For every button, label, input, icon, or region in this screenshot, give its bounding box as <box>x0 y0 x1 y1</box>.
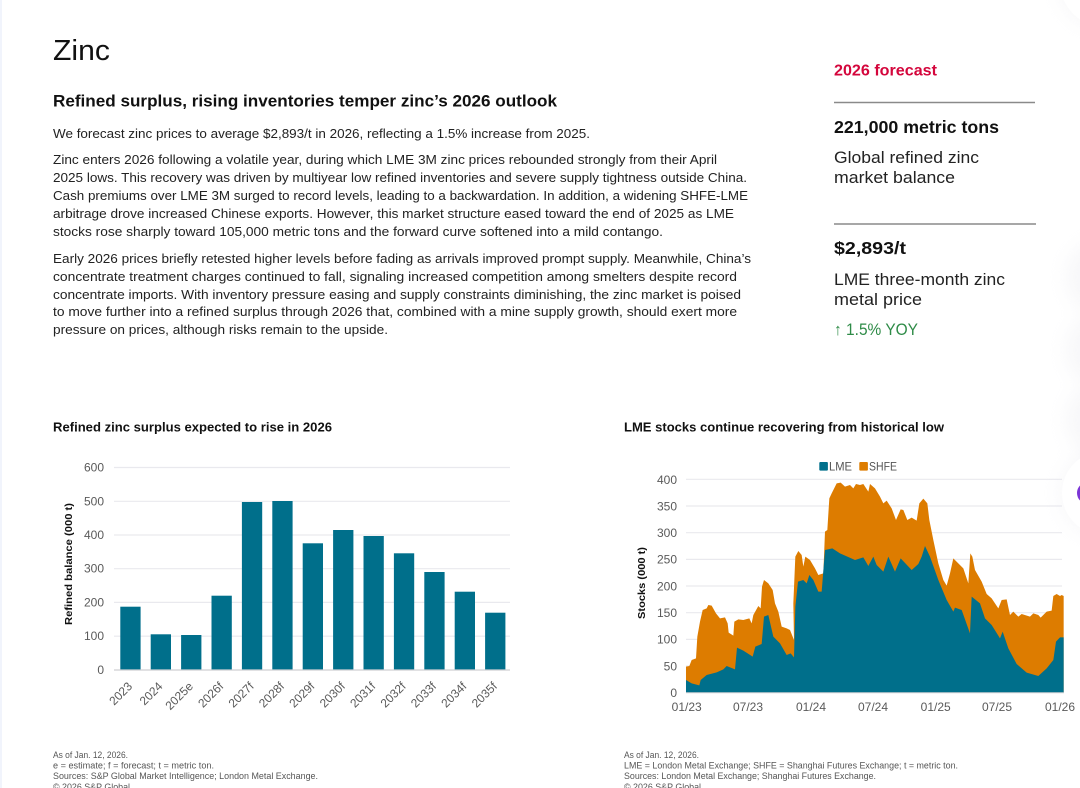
footnotes: Sources: London Metal Exchange; Shanghai Futures Exchange. <box>624 771 876 781</box>
y axis gridlines and labels: 350 <box>657 500 677 514</box>
x axis labels: 2034f <box>438 679 470 710</box>
legend: SHFE <box>869 462 897 474</box>
y axis gridlines and labels: 50 <box>664 660 677 674</box>
title: Zinc <box>53 35 110 67</box>
text block: 2026 outlook <box>53 251 752 337</box>
y axis title: Refined balance (000 t) <box>63 503 75 625</box>
x axis labels: 01/25 <box>921 700 951 714</box>
metric: LME price: $2,893/t <box>834 238 906 258</box>
x axis labels <box>672 700 1075 714</box>
text block: 2025 review: Zinc enters 2026 following a volatile year, during which LME 3M zinc prices rebounded strongly from their April <box>53 152 717 167</box>
text block: 2026 outlook: Early 2026 prices briefly retested higher levels before fading as arrivals improved prompt supply. Meanwhile, China’s <box>53 251 752 266</box>
x axis labels: 2026f <box>195 679 227 710</box>
y axis gridlines and labels: 600 <box>84 460 104 474</box>
panel: main article <box>53 35 752 337</box>
x axis labels: 2028f <box>256 679 288 710</box>
metric: LME price: metal price <box>834 291 922 309</box>
y axis gridlines and labels: 400 <box>84 528 104 542</box>
x axis labels: 07/24 <box>858 700 888 714</box>
y axis gridlines and labels: 200 <box>84 596 104 610</box>
footnotes: As of Jan. 12, 2026. <box>624 750 699 760</box>
x axis labels: 2033f <box>408 679 440 710</box>
x axis labels: 07/25 <box>982 700 1012 714</box>
panel: LME stocks chart <box>624 420 1075 788</box>
footnotes <box>53 750 318 788</box>
metric: LME price <box>834 238 1005 309</box>
y axis gridlines and labels: 200 <box>657 580 677 594</box>
x axis labels <box>106 679 500 713</box>
y axis gridlines and labels: 500 <box>84 494 104 508</box>
footnotes: e = estimate; f = forecast; t = metric ton. <box>53 760 214 770</box>
x axis labels: 2025e <box>162 679 196 713</box>
y axis gridlines and labels: 300 <box>84 562 104 576</box>
y axis gridlines and labels: 250 <box>657 552 677 566</box>
metric: refined balance <box>834 117 999 187</box>
x axis labels: 2023 <box>106 679 135 708</box>
x axis labels: 2035f <box>469 679 500 710</box>
text block: 2026 outlook: concentrate treatment charges continued to fall, signaling increased competition among smelters despite record <box>53 269 737 284</box>
heading: 2026 forecast: 2026 forecast <box>834 62 938 80</box>
y axis gridlines and labels: 0 <box>97 663 104 677</box>
x axis labels: 2024 <box>137 679 166 708</box>
x axis labels: 2030f <box>317 679 348 710</box>
y axis gridlines and labels <box>84 460 510 677</box>
text block: 2025 review: stocks rose sharply toward 105,000 metric tons and the forward curve softened into a mild contango. <box>53 224 663 239</box>
footnotes: Sources: S&P Global Market Intelligence; London Metal Exchange. <box>53 771 318 781</box>
y axis title: Stocks (000 t) <box>636 547 648 619</box>
footnotes <box>624 750 958 788</box>
x axis labels: 01/26 <box>1045 700 1075 714</box>
subheading: Refined surplus, rising inventories temper zinc’s 2026 outlook <box>53 92 558 110</box>
area: SHFE <box>686 483 1064 693</box>
metric: year-over-year change: ↑ 1.5% YOY <box>834 321 918 339</box>
page edge floating buttons <box>1058 0 1080 537</box>
text block: 2025 review: 2025 lows. This recovery was driven by multiyear low refined inventories and severe supply tightness outside China. <box>53 170 747 185</box>
text block: 2026 outlook: concentrate imports. With inventory pressure easing and supply constraints diminishing, the zinc market is poised <box>53 287 741 302</box>
legend <box>819 462 897 474</box>
text block: 2026 outlook: to move further into a refined surplus through 2026 that, combined with a mine supply growth, should exert more <box>53 304 737 319</box>
text block: forecast summary: We forecast zinc prices to average $2,893/t in 2026, reflecting a 1.5% increase from 2025. <box>53 126 590 141</box>
area: LME <box>686 546 1064 693</box>
text block: 2025 review: arbitrage drove increased Chinese exports. However, this market structure eased toward the end of 2025 as LME <box>53 206 734 221</box>
footnotes: As of Jan. 12, 2026. <box>53 750 128 760</box>
panel: refined zinc surplus chart <box>53 420 510 788</box>
panel: 2026 forecast sidebar <box>834 62 1036 339</box>
x axis labels: 2027f <box>226 679 257 710</box>
x axis labels: 2029f <box>286 679 318 710</box>
metric: refined balance: Global refined zinc <box>834 149 979 167</box>
y axis gridlines and labels: 300 <box>657 526 677 540</box>
y axis gridlines and labels: 100 <box>84 629 104 643</box>
x axis labels: 2031f <box>347 679 379 710</box>
bars <box>120 501 505 670</box>
chart title: LME stocks continue recovering from historical low <box>624 420 944 434</box>
chart title: Refined zinc surplus expected to rise in 2026 <box>53 420 332 434</box>
y axis gridlines and labels: 100 <box>657 632 677 646</box>
y axis gridlines and labels <box>657 473 1062 700</box>
x axis labels: 01/24 <box>796 700 826 714</box>
x axis labels: 01/23 <box>672 700 702 714</box>
y axis gridlines and labels: 400 <box>657 473 677 487</box>
legend: LME <box>829 462 852 474</box>
stacked area chart <box>686 483 1064 693</box>
footnotes: LME = London Metal Exchange; SHFE = Shanghai Futures Exchange; t = metric ton. <box>624 760 958 770</box>
text block: 2026 outlook: pressure on prices, although risks remain to the upside. <box>53 322 388 337</box>
metric: refined balance: 221,000 metric tons <box>834 117 999 137</box>
x axis labels: 07/23 <box>733 700 763 714</box>
text block: 2025 review <box>53 152 748 239</box>
y axis gridlines and labels: 150 <box>657 606 677 620</box>
metric: refined balance: market balance <box>834 169 955 187</box>
y axis gridlines and labels: 0 <box>670 686 677 700</box>
text block: 2025 review: Cash premiums over LME 3M surged to record levels, leading to a backwardation. In addition, a widening SHFE-LME <box>53 188 748 203</box>
x axis labels: 2032f <box>378 679 409 710</box>
metric: LME price: LME three-month zinc <box>834 271 1005 289</box>
